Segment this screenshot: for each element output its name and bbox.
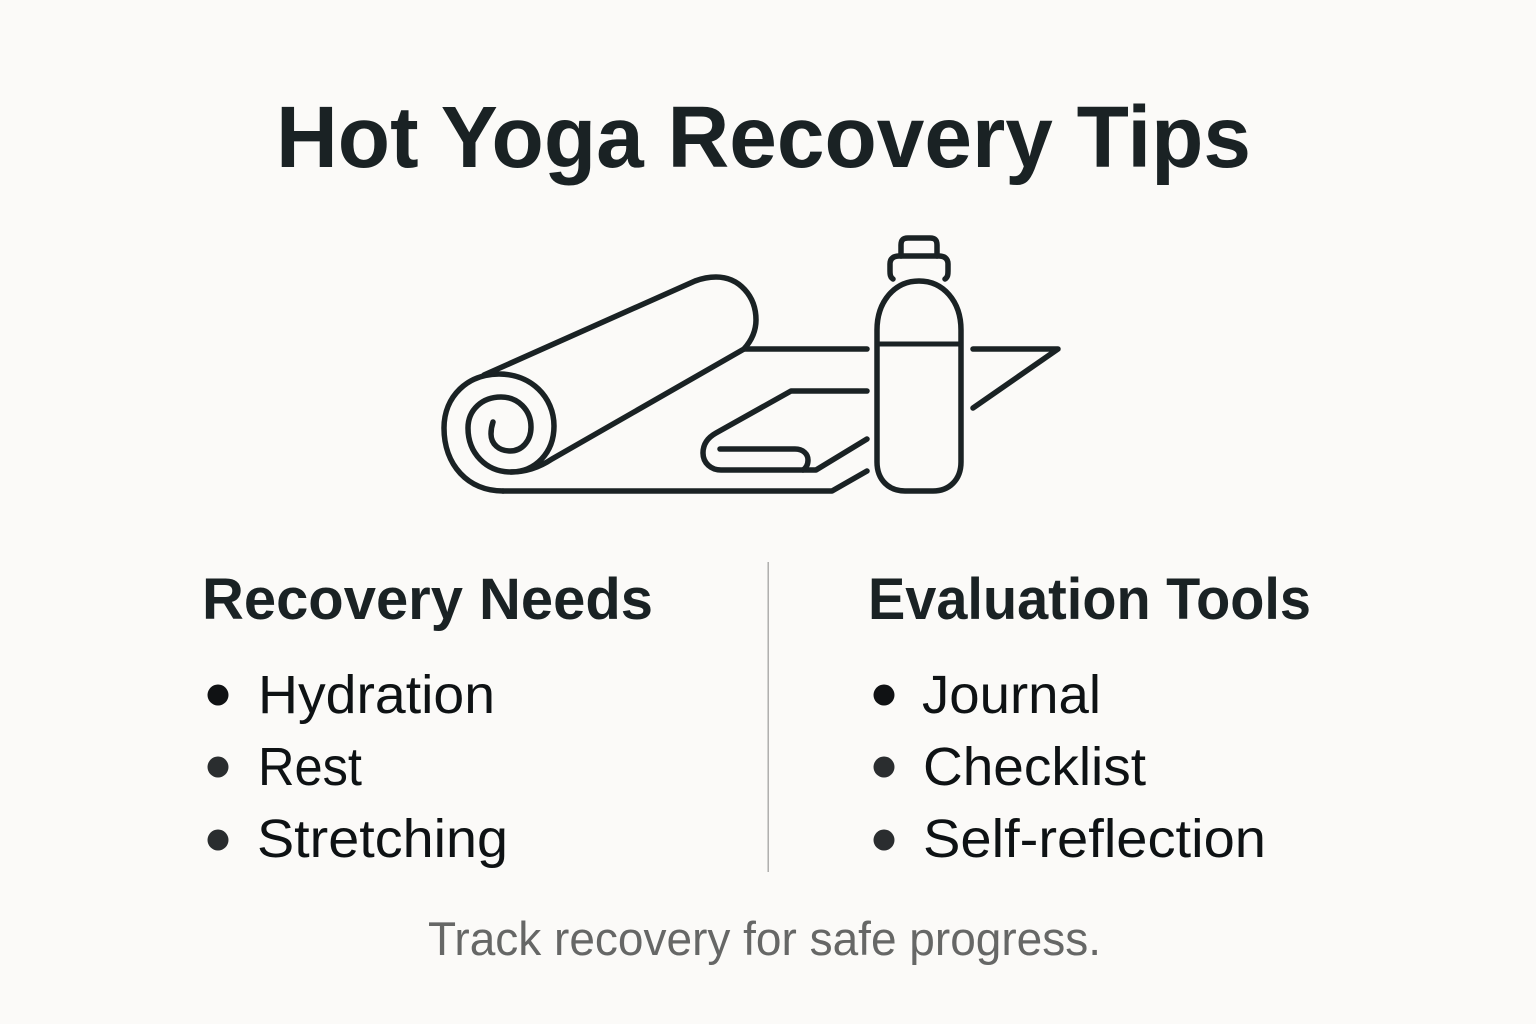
- list item: rest: Rest: [258, 737, 362, 797]
- list item: stretching: Stretching: [257, 809, 508, 869]
- title: Hot Yoga Recovery Tips: [276, 89, 1251, 186]
- rolled mat with spiral end: [444, 277, 756, 491]
- water bottle: [877, 238, 961, 491]
- list item: hydration: Hydration: [258, 665, 495, 725]
- icon: rolled yoga mat and water bottle: [444, 238, 1058, 491]
- panel: recovery needs: [202, 567, 653, 869]
- unrolled mat edges and fold: [503, 349, 1058, 491]
- footer note: Track recovery for safe progress.: [428, 912, 1101, 965]
- panel: evaluation tools: [868, 567, 1311, 869]
- heading: evaluation tools: Evaluation Tools: [868, 567, 1311, 632]
- list item: checklist: Checklist: [923, 737, 1146, 797]
- list item: journal: Journal: [922, 665, 1101, 725]
- heading: recovery needs: Recovery Needs: [202, 567, 653, 632]
- list item: rest: [208, 737, 362, 797]
- center divider: [768, 562, 769, 872]
- list item: self-reflection: Self-reflection: [923, 809, 1266, 869]
